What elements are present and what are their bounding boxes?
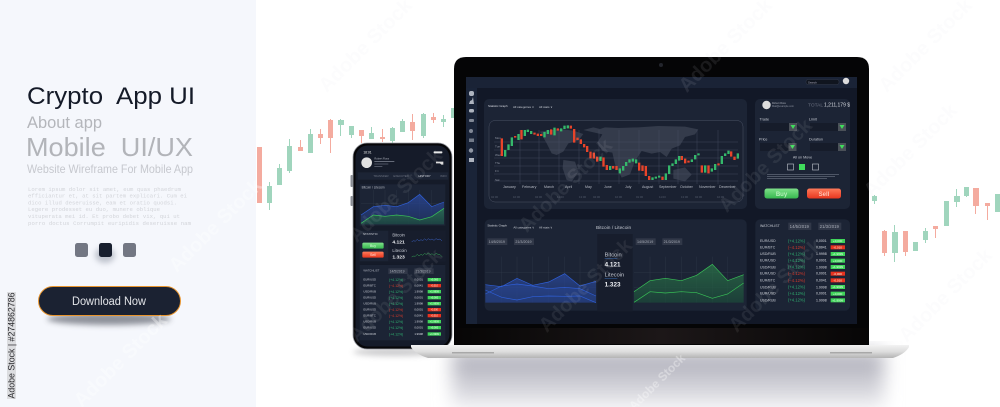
camera (659, 63, 663, 67)
table rows: USD/RUB (760, 265, 776, 269)
phone watchlist: (+4.12%) (389, 296, 403, 300)
panel: candlestick chart: July (625, 185, 632, 189)
stock id side label: Adobe Stock | #274862786 (6, 292, 16, 398)
panel: watchlist: 21/3/2019 (820, 224, 840, 229)
panel: watchlist: 0,0001 (816, 259, 827, 263)
phone tabs: TRANSFER (373, 174, 389, 178)
table rows: USD/RUB (760, 298, 776, 302)
trackpad notches (452, 352, 494, 354)
chart grid (494, 130, 738, 184)
blue area chart (485, 257, 596, 303)
phone watchlist: +1.9999 (430, 303, 439, 306)
watermarks: Adobe Stock (725, 234, 827, 337)
chin (455, 328, 868, 344)
all on move: All on Move (793, 156, 812, 160)
phone watchlist: 21/3/2019 (416, 269, 431, 273)
panel: watchlist: (−4.12%) (788, 278, 806, 283)
laptop screen (466, 77, 857, 324)
panel: watchlist: +0,000 (833, 239, 843, 243)
phone tabs: EXECUTED (393, 174, 409, 178)
panel: trade form: Mail@example.com (772, 105, 794, 108)
phone tabs: HISTORY (418, 174, 431, 178)
phone statistic panel: Litecoin (392, 248, 407, 253)
panel: watchlist: +1.9999 (832, 252, 843, 256)
phone statistic panel: Sell (370, 253, 376, 257)
date chips: 21/3/2019 (515, 240, 532, 244)
panel: bitcoin / litecoin: All stats ∨ (539, 226, 552, 230)
background candlesticks left (257, 108, 455, 210)
dropdown arrows (788, 123, 846, 151)
total: TOTAL (808, 102, 823, 108)
form fields: Limit (809, 118, 817, 122)
panel: watchlist: +0,000 (833, 259, 843, 263)
panel: candlestick chart: 13:00 (579, 195, 586, 199)
panel: candlestick chart (484, 99, 747, 209)
lorem paragraph: vituperata mei id. Et probo debet vix, qui ut (28, 213, 180, 220)
phone statistic panel: Buy (370, 244, 376, 248)
panel: watchlist: 0,0001 (816, 239, 827, 243)
phone watchlist: +0,000 (430, 279, 439, 282)
phone watchlist: 0,0041 (414, 284, 423, 288)
disclaimer (767, 174, 839, 179)
panel: candlestick chart: 10:00 (717, 195, 724, 199)
title: Crypto App UI (27, 83, 195, 110)
panel: watchlist: 1.9998 (816, 298, 827, 302)
download button: Download Now (72, 296, 147, 308)
phone watchlist: -0,000 (431, 309, 438, 312)
watermarks (345, 114, 827, 347)
phone watchlist: (+4.12%) (389, 326, 403, 330)
phone watchlist: 1.9998 (414, 302, 423, 306)
phone watchlist: WATCHLIST (363, 269, 380, 273)
panel: candlestick chart: 04:00 (535, 195, 542, 199)
phone watchlist: EUR/USD (363, 278, 376, 282)
panel: candlestick chart: June (604, 185, 612, 189)
panel: watchlist (755, 219, 850, 311)
phone watchlist (360, 265, 445, 340)
panel: candlestick chart: 04:00 (491, 195, 498, 199)
panel: candlestick chart: 11:00 (557, 195, 564, 199)
panel: watchlist: 0,0001 (816, 272, 827, 276)
form fields (759, 118, 823, 142)
panel: watchlist: 0,0041 (816, 279, 827, 283)
axis labels: Wed (495, 153, 501, 157)
phone watchlist: USD/RUB (363, 302, 376, 306)
date chips (487, 238, 682, 245)
phone watchlist: 1.9998 (414, 320, 423, 324)
phone watchlist: +1.9999 (430, 333, 439, 336)
laptop shadow (452, 352, 884, 407)
phone statistic panel: 1.323 (392, 255, 405, 261)
text: Adobe Stock (165, 174, 267, 277)
text: Adobe Stock (895, 244, 997, 347)
panel: bitcoin / litecoin: Bitcoin / Litecoin (596, 225, 631, 231)
panel: watchlist: 1.9998 (816, 285, 827, 289)
phone shadow (353, 348, 437, 356)
phone tabs: INFO (440, 174, 448, 178)
buy button: Buy (776, 192, 788, 198)
panel: watchlist: 0,0001 (816, 292, 827, 296)
axis labels: Fri (495, 169, 499, 173)
phone profile: Robert Ross (374, 157, 390, 161)
download button (38, 286, 180, 325)
world map (540, 126, 698, 182)
panel: watchlist: (−4.12%) (788, 271, 806, 276)
phone watchlist: 0,0001 (414, 278, 423, 282)
search box (806, 80, 839, 84)
lorem paragraph: efficiantur et, at sit partem explicari. Cum ei (28, 192, 188, 200)
watermarks: Adobe Stock (345, 144, 447, 247)
table rows: EUR/BTC (760, 246, 776, 250)
phone watchlist: (+4.12%) (389, 302, 403, 306)
phone watchlist: (+4.12%) (389, 290, 403, 294)
table rows: EUR/USD (760, 239, 776, 243)
phone watchlist: 0,0041 (414, 314, 423, 318)
panel: candlestick chart: December (719, 185, 736, 189)
phone watchlist: -0,010 (431, 315, 438, 318)
panel: candlestick chart: 13:00 (681, 195, 688, 199)
phone watchlist: 1.9998 (414, 290, 423, 294)
axis labels: Tue (495, 144, 500, 148)
option boxes (788, 164, 818, 170)
panel: candlestick chart: September (659, 185, 677, 189)
panel: watchlist: (+4.12%) (788, 291, 806, 296)
phone statistic panel: Bitcoin (392, 232, 405, 237)
panel: watchlist: +1.9999 (832, 265, 843, 269)
panel: candlestick chart: August (642, 185, 653, 189)
phone statistic panel: STATISTIC (363, 232, 379, 236)
panel: candlestick chart: 04:00 (695, 195, 702, 199)
phone watchlist: EUR/BTC (363, 314, 376, 318)
axis labels (495, 136, 501, 182)
table rows: EUR/USD (760, 272, 776, 276)
panel: trade form: 1,211,179 $ (824, 102, 850, 108)
user profile (762, 101, 771, 109)
watermarks: Adobe Stock (535, 234, 637, 337)
panel: watchlist: (+4.12%) (788, 258, 806, 263)
panel: watchlist: +0,000 (833, 292, 843, 296)
phone watchlist: USD/RUB (363, 332, 376, 336)
phone watchlist: 0,0001 (414, 326, 423, 330)
form fields: Trade (760, 118, 769, 122)
phone profile (361, 157, 443, 168)
panel: trade form: Robert Ross (772, 102, 787, 105)
panel: watchlist: +1.9999 (832, 298, 843, 302)
panel: bitcoin / litecoin: 4.121 (605, 261, 621, 268)
panel: watchlist: (+4.12%) (788, 285, 806, 290)
panel: candlestick chart: 04:00 (593, 195, 600, 199)
phone statistic panel: 4.121 (392, 240, 405, 246)
phone watchlist: EUR/USD (363, 326, 376, 330)
panel: bitcoin / litecoin: 1.323 (605, 281, 621, 288)
panel: watchlist: (−4.12%) (788, 245, 806, 250)
date chips: 21/3/2019 (664, 240, 680, 244)
laptop base (411, 345, 909, 358)
phone (350, 143, 452, 349)
panel: candlestick chart: November (699, 185, 716, 189)
laptop lid (454, 57, 869, 345)
status bar: 18:01 (363, 151, 372, 155)
panel: watchlist: -0,000 (833, 272, 842, 276)
panel: watchlist: (+4.12%) (788, 251, 806, 256)
panel: watchlist: 0,0041 (816, 246, 827, 250)
panel: candlestick chart: May (585, 185, 592, 189)
panel: watchlist: (+4.12%) (788, 238, 806, 243)
panel: candlestick chart: 10:00 (615, 195, 622, 199)
background candlesticks right (872, 187, 1000, 262)
phone watchlist: USD/RUB (363, 320, 376, 324)
phone watchlist: 0,0001 (414, 296, 423, 300)
panel: candlestick chart: 10:00 (513, 195, 520, 199)
green area chart (634, 257, 744, 303)
table rows: EUR/USD (760, 259, 776, 263)
panel: candlestick chart: February (522, 185, 537, 189)
panel: watchlist: +1.9999 (832, 285, 843, 289)
panel: watchlist: -0,010 (833, 278, 842, 282)
panel: watchlist: (+4.12%) (788, 265, 806, 270)
panel: bitcoin / litecoin: Statistic Graph (487, 224, 507, 228)
phone chart panel (360, 184, 445, 226)
phone watchlist: (−4.12%) (389, 314, 403, 318)
form fields: Duration (809, 138, 823, 142)
watermarks: Adobe Stock (345, 244, 447, 347)
panel: candlestick chart: All categories ∨ (513, 105, 534, 109)
table rows: EUR/BTC (760, 279, 776, 283)
phone watchlist: EUR/USD (363, 296, 376, 300)
table rows (760, 239, 776, 302)
lorem paragraph: dico illud deseruisse, eam et oratio quodsi. (28, 200, 177, 206)
panel: candlestick chart: 01:00 (636, 195, 643, 199)
panel: watchlist: 14/5/2019 (790, 224, 810, 229)
watermarks: Adobe Stock (515, 134, 617, 237)
phone watchlist: EUR/USD (363, 308, 376, 312)
panel: watchlist: 1.9998 (816, 252, 827, 256)
panel: candlestick chart: All stats ∨ (539, 105, 553, 109)
axis labels: Mon (495, 136, 501, 140)
watermarks: Adobe Stock (715, 114, 817, 217)
panel: trade form (755, 99, 850, 209)
lorem paragraph: Lorem ipsum dolor sit amet, eum quas phaedrum (28, 186, 182, 193)
candles (501, 125, 739, 180)
phone watchlist: +0,000 (430, 297, 439, 300)
phone statistic panel (360, 231, 445, 261)
search box: Search (808, 80, 817, 84)
phone watchlist: +0,000 (430, 327, 439, 330)
date chips: 14/5/2019 (637, 240, 653, 244)
text: Adobe Stock (860, 99, 962, 202)
phone watchlist: USD/RUB (363, 290, 376, 294)
phone chart panel: Bitcoin / Litecoin (362, 186, 385, 190)
form fields: Price (759, 138, 767, 142)
date chips: 14/5/2019 (489, 240, 505, 244)
heading: mobile ui/ux: Mobile UI/UX (26, 132, 193, 162)
panel: candlestick chart: Statistic Graph (488, 104, 508, 108)
lorem paragraph: porro doctus Corrumpit euripidis deseruisse nam (28, 220, 192, 227)
phone watchlist: (+4.12%) (389, 278, 403, 282)
phone watchlist: (+4.12%) (389, 320, 403, 324)
panel: watchlist: -0,010 (833, 245, 842, 249)
phone watchlist: +1.9999 (430, 321, 439, 324)
top bar (466, 77, 857, 88)
phone watchlist: 1.9998 (414, 332, 423, 336)
phone watchlist: +1.9999 (430, 291, 439, 294)
panel: bitcoin / litecoin: All categories ∨ (513, 226, 534, 230)
subtitle: about app: About app (27, 114, 102, 132)
readout: Bitcoin (605, 252, 622, 258)
sell button: Sell (819, 192, 830, 198)
table rows: EUR/USD (760, 292, 776, 296)
panel: candlestick chart: April (565, 185, 572, 189)
axis labels: Sat (495, 178, 500, 182)
user avatar (843, 78, 849, 84)
panel: bitcoin / litecoin: Litecoin (605, 272, 624, 278)
table rows: USD/RUB (760, 285, 776, 289)
left intro panel (0, 0, 256, 407)
axis labels: Thu (495, 161, 501, 165)
phone watchlist: -0,010 (431, 285, 438, 288)
panel: bitcoin / litecoin (485, 219, 747, 311)
phone watchlist: (−4.12%) (389, 308, 403, 312)
panel: candlestick chart: October (680, 185, 694, 189)
phone tabs (358, 172, 448, 180)
panel: candlestick chart: 11:00 (659, 195, 666, 199)
panel: candlestick chart: March (544, 185, 554, 189)
panel: watchlist: 1.9998 (816, 265, 827, 269)
tagline: Website Wireframe For Mobile App (27, 162, 193, 176)
phone watchlist: (−4.12%) (389, 284, 403, 288)
lorem paragraph (28, 186, 192, 227)
lorem paragraph: Legere prodesset eu duo, munere oblique (28, 206, 160, 213)
phone watchlist: 14/5/2019 (390, 269, 405, 273)
phone watchlist: EUR/BTC (363, 284, 376, 288)
pagination dots (75, 243, 136, 263)
panel: candlestick chart: January (503, 185, 516, 189)
panel: watchlist: (+4.12%) (788, 298, 806, 303)
phone watchlist: (+4.12%) (389, 332, 403, 336)
panel: watchlist: WATCHLIST (760, 224, 781, 228)
phone watchlist: 0,0001 (414, 308, 423, 312)
table rows: USD/RUB (760, 252, 776, 256)
sidebar (466, 88, 477, 324)
